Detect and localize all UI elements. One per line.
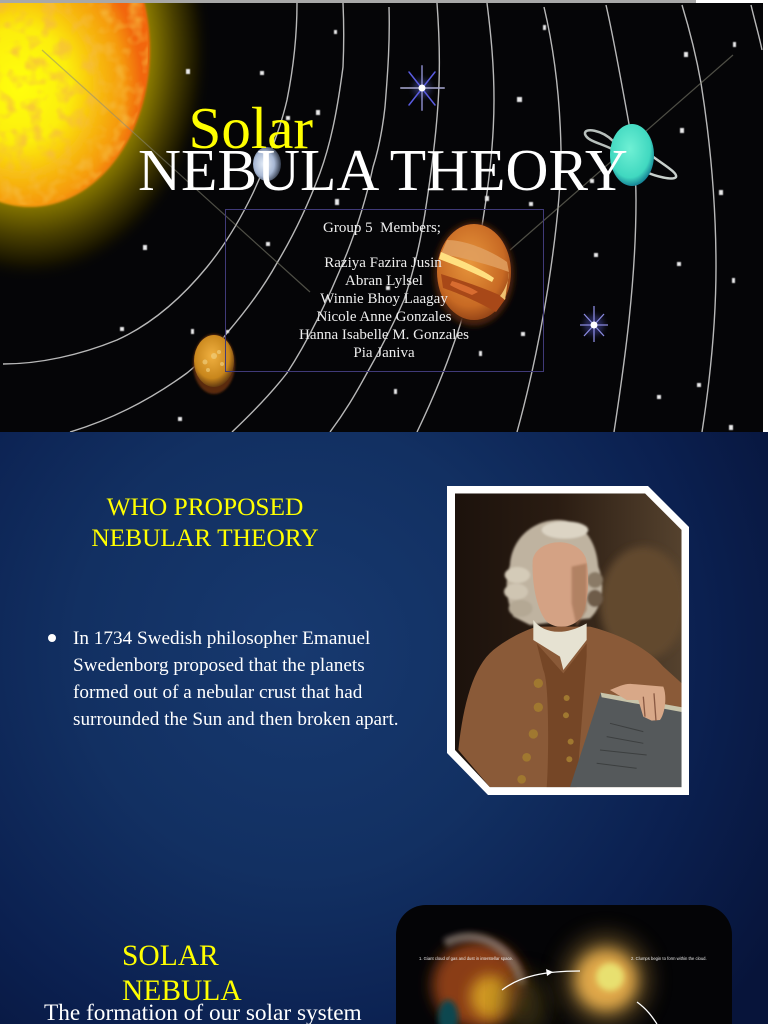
title: Nebula Theory: NEBULA THEORY	[138, 137, 628, 203]
icon: sun with glow	[0, 0, 212, 282]
text block: Swedenborg: Swedenborg proposed that the planets	[73, 655, 365, 676]
cloud of gas and dust	[432, 937, 547, 1024]
text box outline	[226, 210, 544, 372]
icon: small grey planet behind title	[253, 147, 281, 181]
icon: blue sparkle star top	[401, 66, 444, 110]
text block: group members: Group 5 Members;	[323, 220, 441, 236]
heading: solar nebula: NEBULA	[122, 975, 242, 1007]
captions: 2. Clumps begin to form within the cloud.	[631, 956, 707, 961]
heading: solar nebula	[122, 940, 242, 1007]
icon: bullet	[48, 634, 56, 642]
icon: banded orange planet	[434, 222, 514, 326]
heading: who proposed: WHO PROPOSED	[107, 493, 303, 521]
heading: who proposed	[91, 493, 319, 552]
orbit lines	[3, 3, 762, 432]
heading: solar nebula: SOLAR	[122, 940, 219, 972]
text block: group members: Hanna Isabelle M. Gonzales	[299, 327, 469, 343]
text block: Swedenborg: In 1734 Swedish philosopher Emanuel	[73, 628, 370, 649]
coat	[458, 627, 682, 787]
panel: nebula formation image	[396, 905, 732, 1024]
face	[533, 542, 588, 627]
title: Solar: Solar	[188, 95, 313, 161]
buttons	[517, 679, 574, 784]
collar	[533, 620, 587, 670]
collapsing glow	[564, 936, 648, 1024]
text block: group members: Nicole Anne Gonzales	[317, 309, 452, 325]
text block: Swedenborg: surrounded the Sun and then broken apart.	[73, 709, 399, 730]
portrait frame	[447, 486, 689, 795]
icon: small stars	[120, 25, 736, 430]
heading: who proposed: NEBULAR THEORY	[91, 524, 319, 552]
text block: group members: Abran Lylsel	[345, 273, 423, 289]
icon: yellow planet	[193, 334, 235, 394]
wig	[504, 520, 603, 625]
text block: group members: Pia Janiva	[353, 345, 415, 361]
text block: group members: Raziya Fazira Jusin	[324, 255, 442, 271]
text block: Swedenborg	[73, 628, 399, 730]
portrait painting	[455, 493, 687, 787]
book	[570, 693, 682, 787]
hand	[610, 684, 665, 721]
icon: teal ringed planet	[585, 124, 676, 186]
faint diagonal lines	[42, 50, 733, 292]
icon: blue sparkle star lower	[580, 306, 608, 342]
panel: solar system cover slide	[0, 0, 768, 432]
arrows	[502, 969, 657, 1024]
panel: navy slides background	[0, 432, 768, 1024]
text block: group members	[299, 220, 469, 361]
text block: Swedenborg: formed out of a nebular crust that had	[73, 682, 363, 703]
captions: 1. Giant cloud of gas and dust in interstellar space.	[419, 956, 513, 961]
text block: group members: Winnie Bhoy Laagay	[320, 291, 448, 307]
captions	[419, 956, 706, 961]
